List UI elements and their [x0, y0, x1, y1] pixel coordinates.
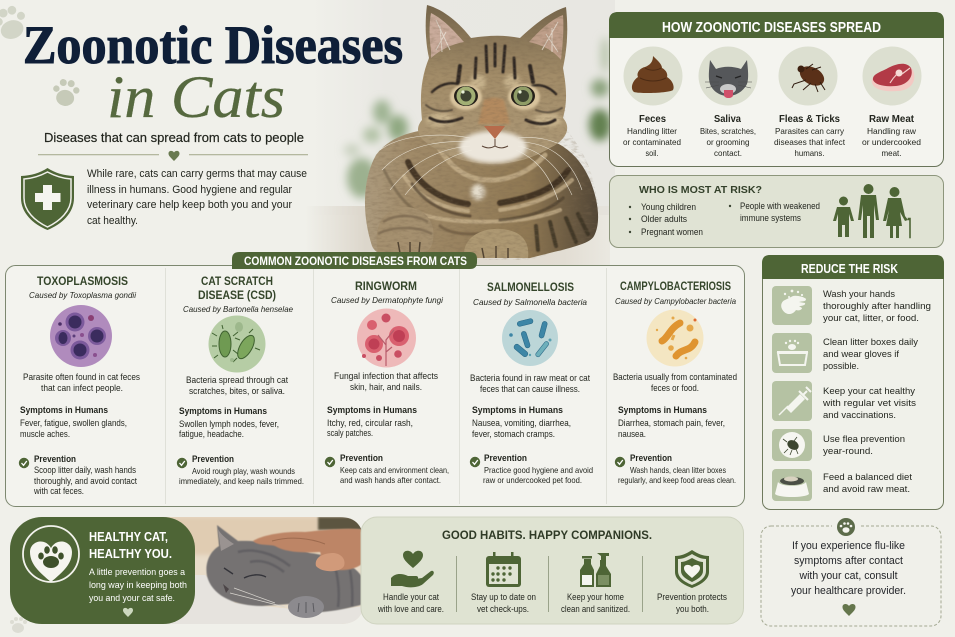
decorative paw: top left [0, 3, 31, 43]
title: Zoonotic Diseases [23, 15, 403, 75]
decorative paw: beside in Cats [51, 78, 81, 108]
item: feces: Feces [639, 113, 666, 125]
item: raw meat: Handling raw [867, 126, 917, 136]
card: salmonellosis: SALMONELLOSIS [487, 280, 574, 294]
panel: healthy cat healthy you [10, 517, 195, 624]
risk tips: and avoid raw meat. [823, 484, 910, 495]
cat body [365, 128, 598, 258]
risk list: immune systems [740, 213, 802, 223]
intro text: illness in humans. Good hygiene and regular [87, 184, 292, 196]
card: campylobacteriosis: feces or food. [651, 383, 699, 393]
icon: heart in hand [391, 551, 434, 587]
card: toxoplasmosis: Parasite often found in cat feces [23, 372, 140, 382]
card: cat scratch disease [177, 274, 304, 486]
heading: WHO IS MOST AT RISK? [639, 184, 762, 196]
whiskers [380, 135, 590, 200]
card: salmonellosis: fever, stomach cramps. [472, 429, 555, 439]
risk list [629, 201, 820, 237]
cat paw [288, 596, 324, 618]
card: ringworm [325, 279, 449, 485]
card: cat scratch disease: Swollen lymph nodes, fever, [179, 419, 279, 429]
background plant right [589, 37, 611, 141]
heading: REDUCE THE RISK [801, 261, 898, 276]
heading: HEALTHY CAT, [89, 530, 168, 544]
card: salmonellosis: Bacteria found in raw meat or cat [470, 373, 590, 383]
section banner: COMMON ZOONOTIC DISEASES FROM CATS [244, 254, 467, 268]
icon: paw badge [837, 518, 855, 536]
icon: orange bacteria [646, 310, 704, 366]
habits captions: you both. [676, 604, 709, 614]
icon: food bowl [772, 469, 812, 501]
intro text [87, 168, 307, 227]
card: salmonellosis: raw or undercooked pet food. [483, 475, 582, 485]
item: fleas and ticks: diseases that infect [774, 137, 846, 147]
card: cat scratch disease: Symptoms in Humans [179, 406, 267, 417]
card: toxoplasmosis: Caused by Toxoplasma gondii [29, 290, 137, 300]
card: campylobacteriosis: Symptoms in Humans [618, 405, 707, 416]
icon: cat face with tongue [698, 46, 758, 106]
neck stripes [384, 162, 588, 250]
risk tips: year-round. [823, 446, 873, 457]
item: fleas and ticks: Fleas & Ticks [779, 113, 840, 125]
hand [253, 529, 364, 570]
card: toxoplasmosis: Fever, fatigue, swollen glands, [20, 418, 127, 428]
card: ringworm: scaly patches. [327, 428, 373, 438]
fur texture overlay [360, 0, 600, 262]
icon: child, adult, elder figures [833, 184, 910, 238]
item: saliva [700, 113, 756, 158]
icon: shield with cross [21, 168, 74, 230]
card: toxoplasmosis: TOXOPLASMOSIS [37, 274, 128, 288]
risk list: Young children [641, 202, 696, 212]
intro text: While rare, cats can carry germs that may cause [87, 168, 307, 180]
card: ringworm: Symptoms in Humans [327, 405, 417, 416]
heading: GOOD HABITS. HAPPY COMPANIONS. [442, 528, 652, 542]
risk tips: with regular vet visits [822, 398, 916, 409]
eyes [450, 84, 540, 110]
item: fleas and ticks: humans. [794, 148, 824, 158]
icon: syringe [772, 381, 812, 421]
muzzle [459, 131, 527, 163]
item: saliva: Bites, scratches, [700, 126, 756, 136]
card: salmonellosis: Caused by Salmonella bacteria [473, 297, 587, 307]
card: ringworm: Prevention [340, 453, 383, 464]
card: cat scratch disease: DISEASE (CSD) [198, 288, 276, 302]
card: ringworm: Caused by Dermatophyte fungi [331, 295, 444, 305]
cream face patches [426, 74, 562, 127]
item: feces: soil. [646, 148, 658, 158]
card: toxoplasmosis [19, 274, 140, 496]
habits captions: Keep your home [567, 592, 624, 602]
panel: reduce the risk [762, 255, 944, 510]
forehead stripes [426, 44, 562, 124]
nose [484, 126, 505, 139]
item: feces: or contaminated [623, 137, 681, 147]
icon: purple parasite cells [50, 305, 112, 367]
icon: heart [123, 608, 133, 617]
card: salmonellosis [470, 280, 593, 485]
callout: consult your healthcare provider: your healthcare provider. [791, 585, 906, 597]
panel: healthy cat healthy you: HEALTHY YOU. [89, 547, 172, 561]
item: saliva: or grooming [706, 137, 750, 147]
item: raw meat [862, 113, 921, 158]
habits captions: Prevention protects [657, 592, 728, 602]
risk tips: Feed a balanced diet [823, 472, 912, 483]
risk tips: Keep your cat healthy [823, 386, 915, 397]
card: salmonellosis: Nausea, vomiting, diarrhea, [472, 418, 571, 428]
heart divider [38, 151, 308, 161]
card: cat scratch disease: CAT SCRATCH [201, 274, 273, 288]
card: toxoplasmosis: that can infect people. [41, 383, 123, 393]
habits captions: Stay up to date on [471, 592, 536, 602]
panel: healthy cat healthy you: you and your cat safe. [89, 593, 175, 604]
title script line: in Cats [107, 64, 285, 130]
cat body and head [206, 525, 364, 612]
item: raw meat: meat. [882, 148, 902, 158]
risk tips [822, 289, 931, 495]
icon: calendar [486, 552, 521, 587]
card: ringworm: Fungal infection that affects [334, 371, 438, 381]
risk tips: and wear gloves if [823, 349, 899, 360]
message: A little prevention goes a [89, 567, 186, 578]
card: cat scratch disease: scratches, bites, or saliva. [189, 386, 285, 396]
card: salmonellosis: Prevention [484, 453, 527, 464]
heading: HOW ZOONOTIC DISEASES SPREAD [662, 19, 881, 36]
card: toxoplasmosis: Scoop litter daily, wash hands [34, 465, 137, 475]
habits captions: vet check-ups. [477, 604, 529, 614]
nose bridge [478, 98, 510, 124]
bedding [305, 206, 610, 266]
panel: how zoonotic diseases spread [609, 12, 944, 166]
risk tips: Use flea prevention [823, 434, 905, 445]
panel: healthy cat healthy you: long way in keeping both [89, 580, 187, 591]
card: ringworm: skin, hair, and nails. [350, 382, 422, 392]
card: ringworm: RINGWORM [355, 279, 417, 293]
card: ringworm: Itchy, red, circular rash, [327, 418, 413, 428]
icon: green bacteria [208, 316, 266, 372]
card: cat scratch disease: immediately, and keep nails trimmed. [179, 476, 304, 486]
card: toxoplasmosis: Prevention [34, 454, 76, 465]
intro text: cat healthy. [87, 215, 138, 227]
icon: heart [842, 604, 856, 616]
card: cat scratch disease: Bacteria spread through cat [186, 375, 288, 385]
habits captions: with love and care. [377, 604, 444, 614]
icon: pink fungi [357, 308, 416, 368]
icon: check [470, 457, 480, 467]
chest light patch [471, 184, 485, 200]
item: feces: Handling litter [627, 126, 677, 136]
callout: consult your healthcare provider [761, 518, 941, 626]
card: ringworm: Keep cats and environment clean, [340, 466, 449, 475]
pale fur bands [404, 150, 572, 222]
item: raw meat: or undercooked [862, 137, 921, 147]
card: campylobacteriosis [613, 279, 737, 485]
icon: cleaning bottles [580, 553, 611, 587]
risk list: People with weakened [740, 201, 820, 211]
item: fleas and ticks [774, 113, 846, 158]
card: cat scratch disease: Avoid rough play, wash wounds [192, 466, 295, 476]
hero photo: tabby cat [305, 0, 615, 266]
photo: sleeping grey cat with hand [150, 517, 364, 624]
risk tips: Wash your hands [823, 289, 895, 300]
card: toxoplasmosis: with cat feces. [33, 486, 84, 496]
item: fleas and ticks: Parasites can carry [775, 126, 845, 136]
card: toxoplasmosis: muscle aches. [20, 429, 70, 439]
panel: good habits happy companions [361, 517, 744, 624]
item: feces [623, 113, 681, 158]
panel: who is most at risk [610, 176, 944, 248]
card: campylobacteriosis: Prevention [630, 453, 672, 464]
habits captions: clean and sanitized. [561, 604, 630, 614]
icon: flea [778, 46, 838, 106]
icon: check [177, 458, 187, 468]
callout: consult your healthcare provider: If you experience flu-like [792, 540, 905, 552]
icon: raw meat [862, 46, 922, 106]
risk list: Older adults [641, 214, 688, 224]
item: saliva: Saliva [714, 113, 741, 125]
habits captions: Handle your cat [383, 592, 439, 602]
icon: feces [624, 46, 682, 106]
risk tips: Clean litter boxes daily [823, 337, 918, 348]
callout: consult your healthcare provider: symptoms after contact [794, 555, 903, 567]
intro text: veterinary care help keep both you and your [87, 199, 292, 211]
card: campylobacteriosis: regularly, and keep food areas clean. [618, 475, 736, 485]
card: ringworm: and wash hands after contact. [340, 476, 441, 485]
risk tips: thoroughly after handling [823, 301, 931, 312]
background plant left [344, 100, 408, 198]
card: cat scratch disease: Caused by Bartonella henselae [183, 304, 293, 314]
panel: common zoonotic diseases [6, 266, 744, 506]
card: salmonellosis: Symptoms in Humans [472, 405, 563, 416]
card: salmonellosis: Practice good hygiene and avoid [484, 465, 593, 475]
card: campylobacteriosis: Wash hands, clean litter boxes [630, 465, 726, 475]
icon: blue bacteria [502, 310, 558, 366]
left paw [377, 207, 433, 255]
card: cat scratch disease: Prevention [192, 454, 234, 465]
item: saliva: contact. [714, 148, 742, 158]
icon: check [19, 458, 29, 468]
card: toxoplasmosis: Symptoms in Humans [20, 405, 108, 416]
card: cat scratch disease: fatigue, headache. [179, 429, 244, 439]
card: campylobacteriosis: nausea. [618, 429, 646, 439]
risk tips: and vaccinations. [823, 410, 896, 421]
icon: shield heart [675, 550, 709, 588]
item: raw meat: Raw Meat [869, 113, 914, 125]
card: salmonellosis: feces that can cause illness. [480, 384, 580, 394]
head [418, 5, 567, 164]
icon: check [615, 457, 625, 467]
habits captions [377, 592, 728, 614]
right paw [464, 229, 528, 258]
card: campylobacteriosis: Bacteria usually from contaminated [613, 372, 737, 382]
icon: heart with paw in ring [23, 526, 79, 582]
icon: litter box [772, 333, 812, 373]
risk tips: your cat, litter, or food. [823, 313, 919, 324]
icon: flea prevention [772, 429, 812, 461]
icon: washing hands [772, 286, 812, 325]
callout: consult your healthcare provider: with your cat, consult [799, 570, 898, 582]
risk list: Pregnant women [641, 227, 703, 237]
subtitle: Diseases that can spread from cats to people [44, 130, 304, 145]
card: campylobacteriosis: Caused by Campylobacter bacteria [615, 296, 736, 306]
card: campylobacteriosis: Diarrhea, stomach pain, fever, [618, 418, 725, 428]
icon: check [325, 457, 335, 467]
card: campylobacteriosis: CAMPYLOBACTERIOSIS [620, 279, 731, 293]
card: toxoplasmosis: thoroughly, and avoid contact [34, 476, 137, 486]
blanket [150, 575, 364, 624]
ears inner [430, 13, 464, 58]
risk tips: possible. [823, 361, 859, 372]
decorative paw: bottom left [10, 617, 27, 633]
